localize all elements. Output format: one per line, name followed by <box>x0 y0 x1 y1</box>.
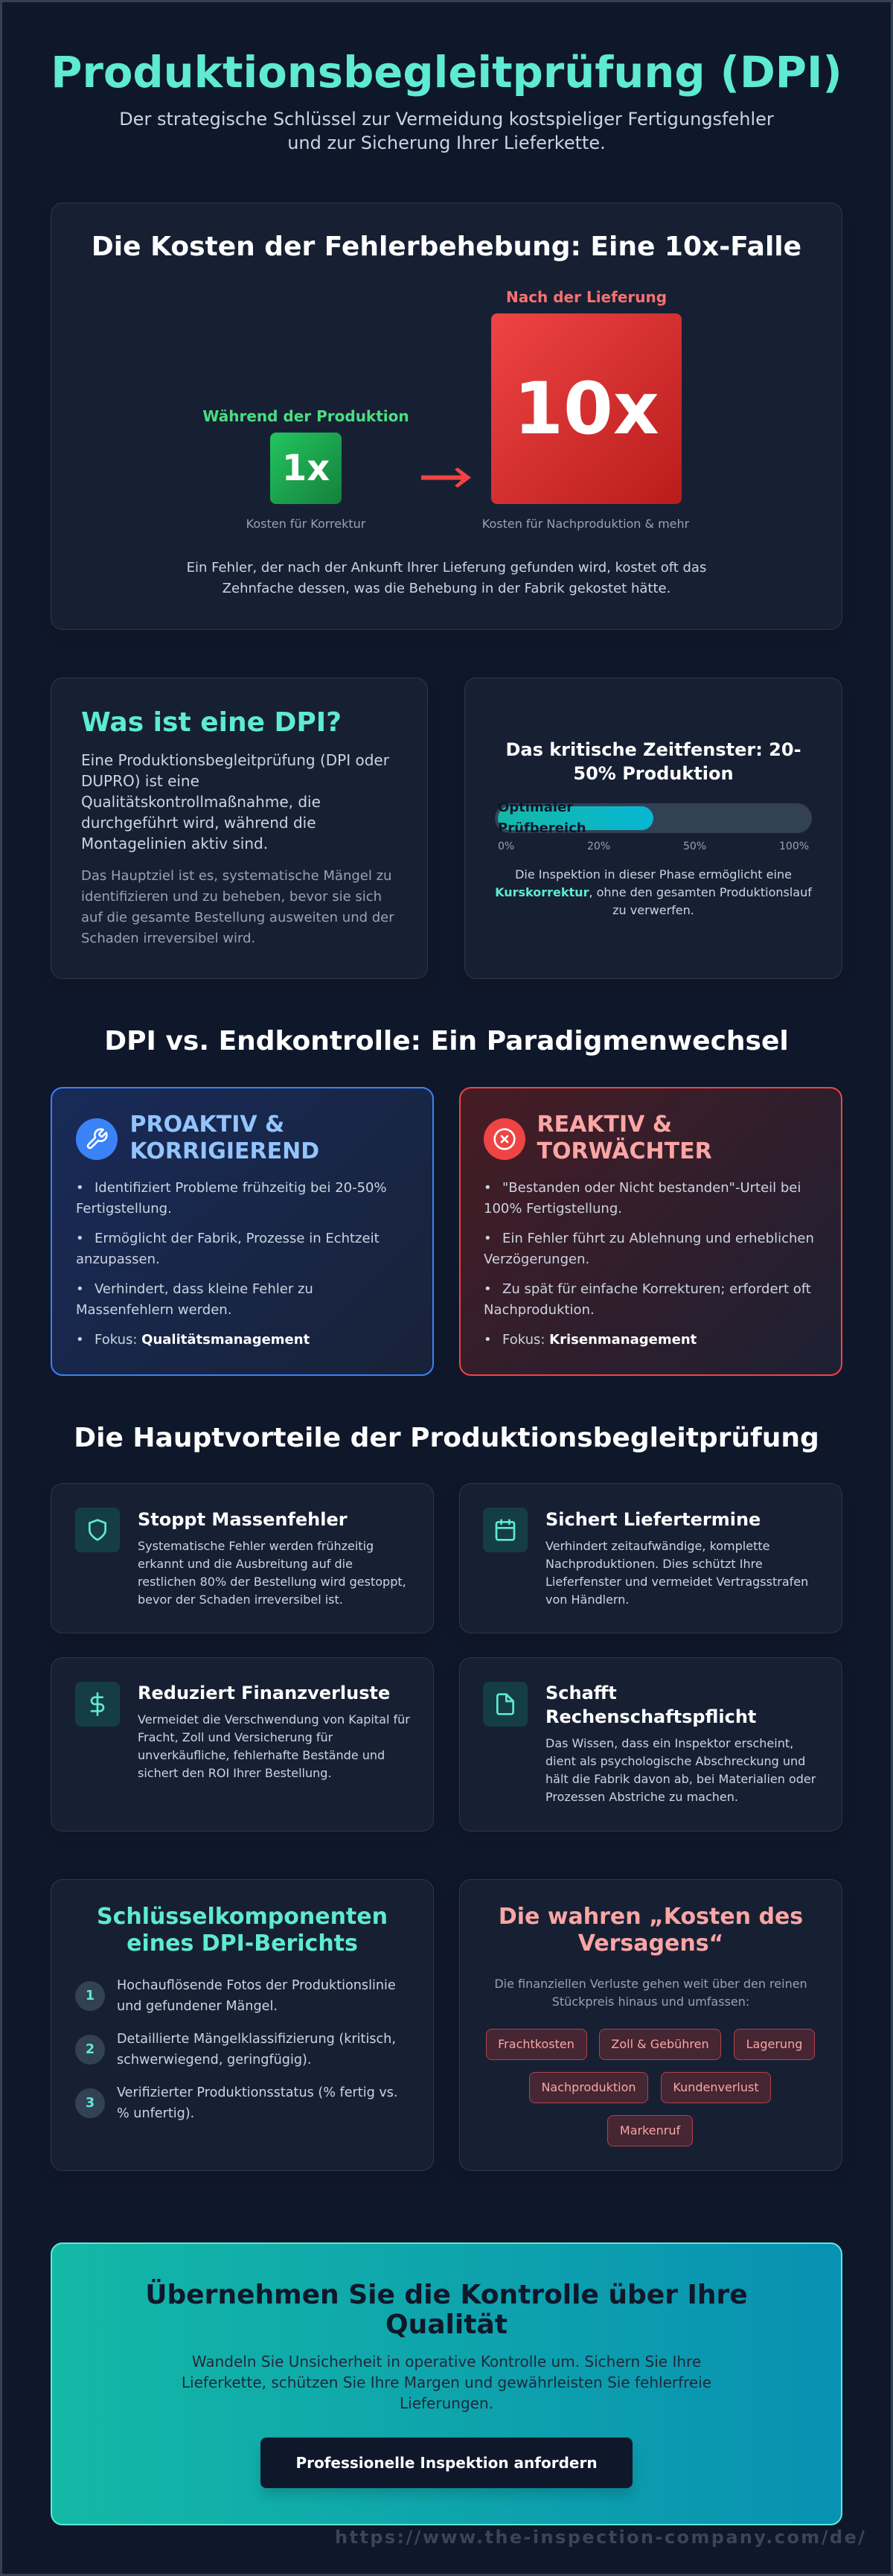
description: von Händlern. <box>545 1593 629 1607</box>
heading: eines DPI-Berichts <box>127 1931 358 1957</box>
item 3 <box>117 2085 398 2121</box>
bar: 1x cost <box>270 433 342 504</box>
title: Reduziert Finanzverluste <box>138 1683 390 1703</box>
bullet 4: • <box>76 1332 84 1348</box>
panel: cost of fixing defects <box>51 203 842 630</box>
icon: dollar <box>75 1682 120 1727</box>
number 2: 2 <box>86 2042 95 2057</box>
title: Produktionsbegleitprüfung (DPI) <box>51 48 842 98</box>
subtitle <box>119 109 774 153</box>
heading: Schlüsselkomponenten <box>97 1904 388 1930</box>
explanation <box>187 560 706 596</box>
item 3: Verifizierter Produktionsstatus (% fertig vs. <box>117 2085 398 2100</box>
bullet 1: • <box>76 1180 84 1196</box>
heading: DPI vs final inspection: DPI vs. Endkontrolle: Ein Paradigmenwechsel <box>104 1026 789 1056</box>
benefit card: secures delivery dates <box>459 1483 842 1633</box>
bar: 10x cost <box>491 313 682 504</box>
description: erkannt und die Ausbreitung auf die <box>138 1557 353 1571</box>
description: Verhindert zeitaufwändige, komplette <box>545 1539 769 1553</box>
CTA heading <box>145 2279 748 2340</box>
heading: Die wahren „Kosten des <box>499 1904 803 1930</box>
tick 20%: 20% <box>587 841 610 852</box>
panel: report components <box>51 1879 434 2171</box>
description: Fracht, Zoll und Versicherung für <box>138 1730 333 1744</box>
definition: Eine Produktionsbegleitprüfung (DPI oder <box>81 751 389 769</box>
CTA text: Lieferkette, schützen Sie Ihre Margen und gewährleisten Sie fehlerfreie <box>182 2373 711 2391</box>
panel: true cost of failure <box>459 1879 842 2171</box>
benefit card: reduces financial losses <box>51 1657 434 1831</box>
bar: 1x cost: 1x <box>282 447 330 489</box>
icon: shield <box>75 1508 120 1552</box>
tag <box>734 2029 815 2060</box>
description <box>545 1539 808 1607</box>
description <box>138 1712 410 1780</box>
bullet 2 <box>76 1231 380 1267</box>
heading: 50% Produktion <box>573 763 734 784</box>
heading: Versagens“ <box>578 1931 723 1957</box>
item 2 <box>117 2032 396 2068</box>
bullet 1: • <box>484 1180 492 1196</box>
panel: critical time window <box>464 678 842 979</box>
heading: TORWÄCHTER <box>537 1138 712 1164</box>
main goal: identifizieren und zu beheben, bevor sie sich <box>81 889 382 905</box>
bullet 3: Verhindert, dass kleine Fehler zu <box>95 1281 313 1297</box>
title: Sichert Liefertermine <box>545 1509 761 1530</box>
intro: Stückpreis hinaus und umfassen: <box>552 1995 749 2009</box>
range label: Prüfbereich <box>498 820 586 836</box>
title: Rechenschaftspflicht <box>545 1706 756 1727</box>
heading: Das kritische Zeitfenster: 20- <box>505 739 801 760</box>
item 1: Hochauflösende Fotos der Produktionslinie <box>117 1978 396 1993</box>
panel heading: Die Kosten der Fehlerbehebung: Eine 10x-Falle <box>92 232 801 262</box>
range label: Optimaler <box>498 800 573 815</box>
main goal: auf die gesamte Bestellung ausweiten und der <box>81 910 394 925</box>
heading <box>505 739 801 784</box>
label: after delivery: Nach der Lieferung <box>506 288 667 306</box>
call to action <box>51 2242 842 2525</box>
tag: Nachproduktion <box>541 2080 636 2094</box>
label: during production: Während der Produktion <box>202 407 409 425</box>
heading <box>537 1112 712 1164</box>
description: Lieferfenster und vermeidet Vertragsstrafen <box>545 1575 808 1589</box>
tag: Lagerung <box>746 2037 802 2051</box>
heading <box>499 1904 803 1957</box>
optimal range fill <box>498 806 653 830</box>
item 2: schwerwiegend, geringfügig). <box>117 2053 311 2068</box>
panel: what is a DPI <box>51 678 428 979</box>
definition: DUPRO) ist eine <box>81 772 199 790</box>
bullet 1 <box>484 1180 801 1217</box>
benefit card: creates accountability <box>459 1657 842 1831</box>
main goal: Schaden irreversibel wird. <box>81 931 255 946</box>
subtitle: Der strategische Schlüssel zur Vermeidung kostspieliger Fertigungsfehler <box>119 109 774 130</box>
window note <box>495 867 813 917</box>
source url: https://www.the-inspection-company.com/de/ <box>335 2527 866 2548</box>
definition <box>81 751 389 852</box>
bullet 3: • <box>76 1281 84 1297</box>
main goal <box>81 868 394 946</box>
bullet 1: Identifiziert Probleme frühzeitig bei 20-50% <box>95 1180 387 1196</box>
number 3: 3 <box>86 2096 95 2111</box>
tick 0%: 0% <box>498 841 514 852</box>
CTA button <box>260 2438 633 2488</box>
main goal: Das Hauptziel ist es, systematische Mängel zu <box>81 868 391 884</box>
tick 100%: 100% <box>779 841 809 852</box>
heading: REAKTIV & <box>537 1112 672 1138</box>
bullet 2 <box>484 1231 814 1267</box>
tag: Kundenverlust <box>673 2080 759 2094</box>
tag <box>485 2029 586 2060</box>
description: dient als psychologische Abschreckung und <box>545 1754 805 1768</box>
window note: zu verwerfen. <box>612 903 694 917</box>
tag <box>661 2072 771 2103</box>
item 2: Detaillierte Mängelklassifizierung (kritisch, <box>117 2032 396 2047</box>
icon: calendar <box>483 1508 528 1552</box>
definition: Montagelinien aktiv sind. <box>81 835 268 852</box>
bullet 1: "Bestanden oder Nicht bestanden"-Urteil bei <box>502 1180 801 1196</box>
benefit card: stops mass defects <box>51 1483 434 1633</box>
bullet 2: • <box>484 1231 492 1246</box>
bullet 3: Massenfehlern werden. <box>76 1302 231 1318</box>
bullet list <box>76 1180 387 1348</box>
caption: 1x: Kosten für Korrektur <box>246 517 365 531</box>
title <box>545 1683 756 1727</box>
window note: Die Inspektion in dieser Phase ermöglicht eine <box>515 867 792 881</box>
description: Das Wissen, dass ein Inspektor erscheint, <box>545 1736 793 1750</box>
icon: file <box>483 1682 528 1727</box>
description: restlichen 80% der Bestellung wird gestoppt, <box>138 1575 406 1589</box>
heading: PROAKTIV & <box>129 1112 284 1138</box>
bullet 2: Ermöglicht der Fabrik, Prozesse in Echtzeit <box>95 1231 380 1246</box>
number 1: 1 <box>86 1989 95 2003</box>
window note: Kurskorrektur, ohne den gesamten Produktionslauf <box>495 885 812 899</box>
bullet 2: anzupassen. <box>76 1252 160 1267</box>
icon: wrench <box>76 1118 118 1160</box>
CTA text <box>182 2353 711 2412</box>
tag <box>529 2072 648 2103</box>
bullet 2: Verzögerungen. <box>484 1252 589 1267</box>
bullet 4: • <box>484 1332 492 1348</box>
description: sichert den ROI Ihrer Bestellung. <box>138 1766 332 1780</box>
tag <box>599 2029 721 2060</box>
timeline bar <box>495 803 812 833</box>
tag: Frachtkosten <box>498 2037 574 2051</box>
definition: Qualitätskontrollmaßnahme, die <box>81 793 321 811</box>
bullet 3 <box>484 1281 811 1318</box>
explanation: Zehnfache dessen, was die Behebung in der Fabrik gekostet hätte. <box>223 581 670 596</box>
description <box>545 1736 816 1804</box>
tick 50%: 50% <box>683 841 706 852</box>
CTA text: Wandeln Sie Unsicherheit in operative Kontrolle um. Sichern Sie Ihre <box>192 2353 701 2371</box>
bullet 3: • <box>484 1281 492 1297</box>
definition: durchgeführt wird, während die <box>81 814 316 832</box>
description: Systematische Fehler werden frühzeitig <box>138 1539 374 1553</box>
heading <box>129 1112 319 1164</box>
description: bevor der Schaden irreversibel ist. <box>138 1593 343 1607</box>
number 2 <box>75 2035 105 2065</box>
bullet list <box>484 1180 814 1348</box>
number 3 <box>75 2088 105 2118</box>
bullet 4: Fokus: Qualitätsmanagement <box>95 1332 310 1348</box>
heading: KORRIGIEREND <box>129 1138 319 1164</box>
bullet 2: • <box>76 1231 84 1246</box>
intro <box>494 1977 807 2009</box>
explanation: Ein Fehler, der nach der Ankunft Ihrer Lieferung gefunden wird, kostet oft das <box>187 560 706 576</box>
heading: main benefits: Die Hauptvorteile der Produktionsbegleitprüfung <box>74 1423 819 1453</box>
title: Schafft <box>545 1683 617 1703</box>
CTA button: Professionelle Inspektion anfordern <box>295 2454 598 2472</box>
bullet 1: Fertigstellung. <box>76 1201 172 1217</box>
arrow <box>421 468 471 488</box>
tag <box>607 2115 693 2146</box>
range label <box>498 800 586 836</box>
bullet 2: Ein Fehler führt zu Ablehnung und erheblichen <box>502 1231 814 1246</box>
bullet 3: Nachproduktion. <box>484 1302 595 1318</box>
panel: reactive <box>459 1087 842 1376</box>
description: unverkäufliche, fehlerhafte Bestände und <box>138 1748 385 1762</box>
description: Vermeidet die Verschwendung von Kapital für <box>138 1712 410 1727</box>
bullet 3 <box>76 1281 313 1318</box>
bullet 4: Fokus: Krisenmanagement <box>502 1332 697 1348</box>
item 3: % unfertig). <box>117 2106 194 2121</box>
CTA heading: Qualität <box>385 2309 508 2340</box>
CTA heading: Übernehmen Sie die Kontrolle über Ihre <box>145 2280 748 2310</box>
description: Prozessen Abstriche zu machen. <box>545 1790 738 1804</box>
description <box>138 1539 406 1607</box>
bullet 3: Zu spät für einfache Korrekturen; erfordert oft <box>502 1281 811 1297</box>
icon: x circle <box>484 1118 525 1160</box>
intro: Die finanziellen Verluste gehen weit über den reinen <box>494 1977 807 1991</box>
item 1: und gefundener Mängel. <box>117 1999 278 2014</box>
heading <box>97 1904 388 1957</box>
description: Nachproduktionen. Dies schützt Ihre <box>545 1557 763 1571</box>
CTA text: Lieferungen. <box>400 2394 493 2412</box>
bullet 1: 100% Fertigstellung. <box>484 1201 622 1217</box>
item 1 <box>117 1978 396 2014</box>
bullet 1 <box>76 1180 387 1217</box>
caption: 10x: Kosten für Nachproduktion & mehr <box>482 517 689 531</box>
subtitle: und zur Sicherung Ihrer Lieferkette. <box>287 133 606 153</box>
title: Stoppt Massenfehler <box>138 1509 348 1530</box>
heading: Was ist eine DPI? <box>81 707 342 738</box>
number 1 <box>75 1981 105 2011</box>
tag: Zoll & Gebühren <box>611 2037 709 2051</box>
panel: proactive <box>51 1087 434 1376</box>
tag: Markenruf <box>620 2123 680 2137</box>
description: hält die Fabrik davon ab, bei Materialien oder <box>545 1772 816 1786</box>
bar: 10x cost: 10x <box>513 367 659 450</box>
